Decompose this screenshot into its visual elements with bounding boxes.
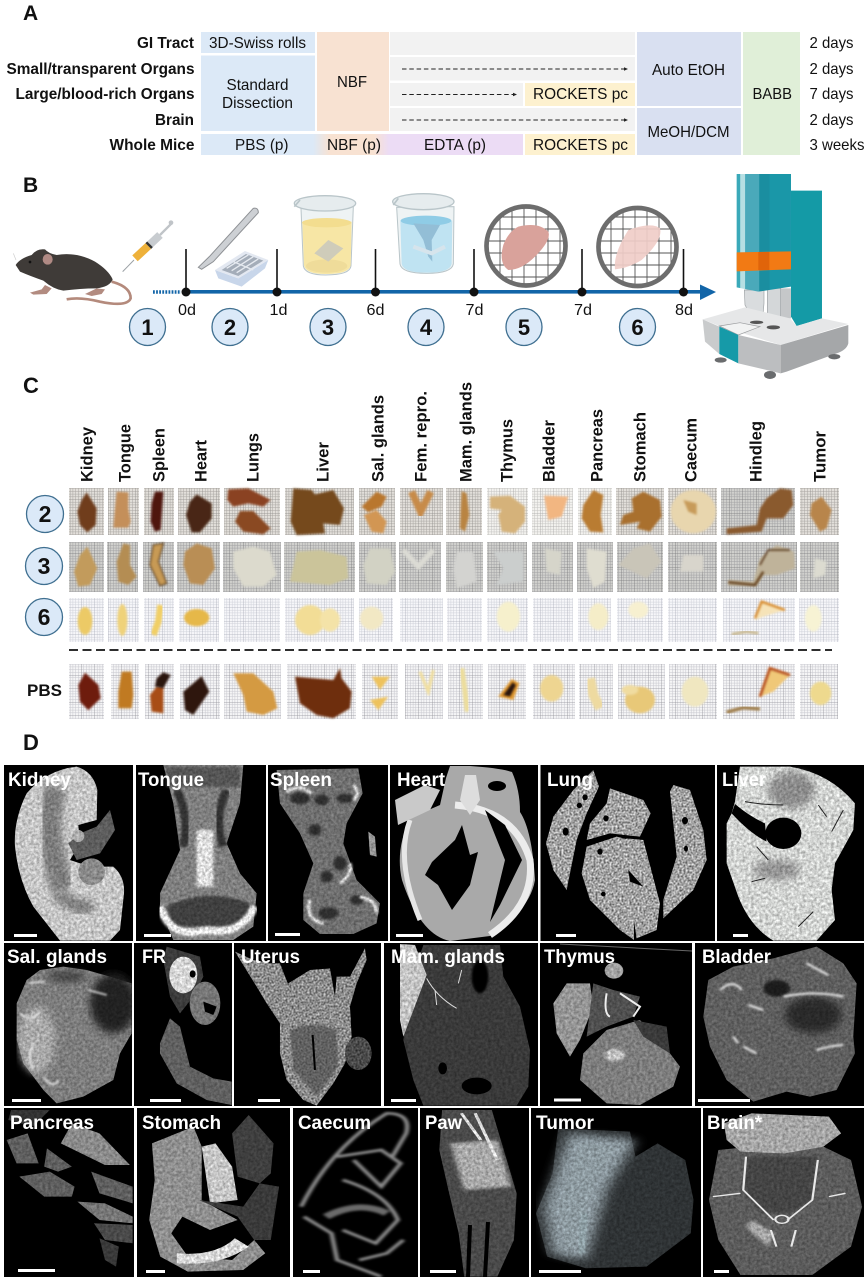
tile: Caecum [668, 542, 717, 592]
tile: Spleen [145, 664, 174, 719]
tile: Spleen [143, 542, 174, 592]
label: Uterus [241, 947, 300, 968]
scale bar [146, 1270, 165, 1273]
step markers and PBS row label: 3 [38, 553, 50, 579]
scale bar [303, 1270, 320, 1273]
label: Liver [722, 770, 767, 791]
tile: Tumor [800, 488, 839, 535]
icon: cleared organ on mesh, step 6 [598, 206, 679, 287]
tile: Spleen [144, 598, 174, 642]
tile: Tongue [108, 488, 139, 535]
row labels: Large/blood-rich Organs [16, 86, 195, 103]
label: Thymus [544, 947, 615, 968]
icon: syringe [123, 220, 173, 272]
tile: Tongue [107, 542, 138, 592]
organ column labels: Lungs [244, 433, 262, 482]
organ column labels: Tumor [812, 430, 830, 482]
image: Pancreas [4, 1108, 134, 1277]
tile: Thymus [487, 598, 528, 642]
scale bar [275, 933, 300, 936]
organ column labels: Bladder [540, 419, 558, 482]
step markers and PBS row label: 6 [38, 604, 50, 630]
tile: Female reproductive [400, 598, 443, 642]
icon: tissue cassette [215, 251, 268, 287]
block: Auto EtOH: Auto EtOH [652, 62, 725, 79]
tile: Stomach [617, 542, 663, 592]
block: MeOH/DCM [637, 108, 741, 155]
icon: mouse [13, 249, 131, 304]
tile: Tumor [800, 542, 839, 592]
tile: Thymus [488, 664, 526, 719]
tile: Salivary glands [359, 488, 395, 535]
image: FR [134, 943, 232, 1106]
tile: Spleen [144, 488, 174, 535]
step markers and PBS row label: PBS [27, 681, 62, 700]
tile: Salivary glands [359, 542, 396, 592]
tile: Heart [180, 664, 220, 719]
step markers and PBS row label [26, 496, 64, 700]
tile: Mammary glands [448, 664, 483, 719]
timeline day labels: 7d [574, 302, 592, 319]
tile: Mammary glands [446, 488, 482, 535]
row: step 6 tissue photos [69, 598, 839, 642]
tile: Heart [177, 542, 220, 592]
image: Thymus [540, 943, 692, 1106]
block: BABB: BABB [752, 86, 792, 103]
step circles 1 to 6: 1 [141, 315, 154, 340]
tile: Liver [285, 598, 354, 642]
durations [810, 35, 864, 154]
tile: Lungs [224, 488, 280, 535]
panel C: organ photographs [23, 373, 839, 719]
tile: Heart [178, 488, 220, 535]
heading: D: D [23, 730, 39, 755]
block: Standard Dissection: Dissection [222, 95, 293, 112]
icon: organ on mesh, step 5 [486, 206, 568, 287]
scale bar [556, 934, 576, 937]
tile: Hindleg [721, 542, 797, 592]
tile: Bladder [533, 664, 575, 719]
block: NBF [317, 32, 389, 131]
tile: Mammary glands [446, 542, 483, 592]
block: MeOH/DCM: MeOH/DCM [648, 124, 730, 141]
scale bar [430, 1270, 456, 1273]
image: Brain [703, 1108, 864, 1277]
block: NBF (p): NBF (p) [327, 137, 381, 154]
image: Lung [540, 765, 715, 941]
tile: Tongue [111, 664, 139, 719]
label: Mam. glands [391, 947, 505, 968]
tile: Liver [287, 664, 356, 719]
tile: Female reproductive [399, 542, 441, 592]
tile: Hindleg [723, 664, 795, 719]
label: Sal. glands [7, 947, 107, 968]
tile: Lungs [223, 542, 281, 592]
timeline arrow [153, 284, 716, 300]
timeline ticks [182, 249, 688, 296]
block: ROCKETS pc large organs: ROCKETS pc [533, 86, 628, 103]
step circles 1 to 6: 4 [420, 315, 433, 340]
organ column labels: Thymus [498, 419, 516, 482]
block: Standard Dissection [201, 56, 315, 131]
tile: Kidney [69, 664, 104, 719]
label: Tumor [536, 1113, 595, 1134]
image: Caecum [293, 1108, 418, 1277]
row: step 2 tissue photos [69, 488, 839, 535]
step circles 1 to 6: 6 [631, 315, 644, 340]
tile: Pancreas [578, 488, 612, 535]
tile: Lungs [224, 664, 281, 719]
block: 3D-Swiss rolls: 3D-Swiss rolls [209, 35, 306, 52]
tile: Kidney [69, 488, 104, 535]
tile: Thymus [487, 488, 528, 535]
scale bar [714, 1270, 729, 1273]
label: Tongue [138, 770, 204, 791]
tile: Kidney [69, 598, 104, 642]
organ column labels [78, 382, 830, 482]
panel D: light-sheet microscopy images [4, 730, 864, 1277]
organ column labels: Kidney [78, 426, 96, 482]
row: step 3 tissue photos [69, 542, 839, 592]
timeline day labels: 6d [366, 302, 384, 319]
row labels: Brain [155, 112, 194, 129]
organ column labels: Caecum [682, 418, 700, 482]
image: Bladder [695, 943, 864, 1106]
timeline day labels [178, 302, 693, 319]
icon: beaker with yellow solution [294, 196, 356, 275]
tile: Lungs [224, 598, 280, 642]
icon: forceps [198, 208, 258, 269]
scale bar [144, 934, 171, 937]
image: Uterus [234, 943, 381, 1106]
scale bar [12, 1099, 41, 1102]
organ column labels: Mam. glands [458, 382, 476, 482]
scale bar [14, 934, 37, 937]
icon: beaker with blue solution [393, 194, 454, 273]
label: FR [142, 947, 166, 968]
durations: 2 days [810, 112, 854, 129]
scale bar [391, 1099, 416, 1102]
step circles 1 to 6: 2 [224, 315, 236, 340]
tile: Thymus [487, 542, 527, 592]
block: ROCKETS pc large organs [525, 83, 635, 106]
dashed separator [69, 649, 832, 651]
tile: Stomach [616, 488, 664, 535]
tile: Liver [285, 488, 354, 535]
tile: Tumor [800, 664, 838, 719]
row labels [6, 35, 195, 154]
tile: Pancreas [579, 664, 613, 719]
organ column labels: Fem. repro. [412, 391, 430, 482]
image: Mammary glands [384, 943, 538, 1106]
tile: Tongue [108, 598, 139, 642]
tile: Bladder [533, 598, 573, 642]
organ column labels: Hindleg [748, 421, 766, 482]
tile: Tumor [799, 598, 839, 642]
tile: Salivary glands [359, 598, 393, 642]
heading: C: C [23, 373, 39, 398]
tile: Pancreas [577, 542, 613, 592]
tile: Stomach [617, 598, 663, 642]
image: Tongue [136, 765, 266, 941]
tile: Caecum [668, 488, 717, 535]
block: grey spacer GI tract [390, 32, 635, 55]
scale bar [554, 1098, 581, 1102]
label: Kidney [8, 770, 71, 791]
image: Liver [717, 765, 864, 941]
row labels: Small/transparent Organs [6, 61, 195, 78]
heading: A: A [23, 2, 38, 25]
icon: light-sheet microscope [703, 174, 848, 379]
block: NBF: NBF [337, 74, 367, 91]
organ column labels: Sal. glands [370, 395, 388, 482]
durations: 2 days [810, 61, 854, 78]
tile: Hindleg [721, 488, 795, 535]
tile: Hindleg [723, 598, 795, 642]
panel A: protocol table [6, 2, 864, 155]
step circles 1 to 6: 5 [518, 315, 530, 340]
tile: Female reproductive [400, 488, 443, 535]
image: Tumor [531, 1108, 701, 1277]
label: Bladder [702, 947, 772, 968]
scale bar [733, 934, 748, 937]
image: Stomach [137, 1108, 290, 1277]
panel B: timeline workflow [13, 174, 848, 379]
label: Brain* [707, 1113, 763, 1134]
block: brain dashed arrow [390, 108, 635, 131]
step markers and PBS row label: 2 [39, 501, 51, 527]
block: PBS (p) [201, 134, 313, 155]
block: Auto EtOH [637, 32, 741, 106]
block: small organs dashed arrow [390, 57, 635, 80]
durations: 2 days [810, 35, 854, 52]
tile: Bladder [532, 488, 573, 535]
block: Standard Dissection: Standard [226, 77, 288, 94]
label: Spleen [270, 770, 332, 791]
step circles 1 to 6: 3 [322, 315, 334, 340]
tile: Salivary glands [362, 664, 398, 719]
tile: Mammary glands [447, 598, 482, 642]
row labels: GI Tract [137, 35, 195, 52]
organ column labels: Liver [314, 441, 332, 482]
label: Stomach [142, 1113, 221, 1134]
image: Kidney [4, 765, 133, 941]
scale bar [150, 1099, 181, 1102]
timeline day labels: 8d [675, 302, 693, 319]
image: Salivary glands [4, 943, 132, 1106]
image: Heart [390, 765, 538, 941]
label: Pancreas [10, 1113, 94, 1134]
timeline day labels: 1d [270, 302, 288, 319]
label: Caecum [298, 1113, 371, 1134]
tile: Kidney [69, 542, 104, 592]
block: PBS (p): PBS (p) [235, 137, 288, 154]
tile: Heart [179, 598, 219, 642]
tile: Stomach [618, 664, 665, 719]
scale bar [698, 1099, 750, 1102]
organ column labels: Tongue [116, 424, 134, 482]
heading: B: B [23, 174, 38, 197]
tile: Female reproductive [405, 664, 443, 719]
organ column labels: Pancreas [588, 409, 606, 482]
tile: Bladder [532, 542, 573, 592]
tile: Liver [284, 542, 355, 592]
block: ROCKETS pc whole mice: ROCKETS pc [533, 137, 628, 154]
label: Lung [547, 770, 593, 791]
label: Paw [425, 1113, 462, 1134]
block: large organs dashed arrow [390, 83, 523, 106]
row labels: Whole Mice [110, 137, 195, 154]
row: PBS tissue photos [69, 664, 838, 719]
block: EDTA (p): EDTA (p) [424, 137, 486, 154]
step circles 1 to 6 [130, 308, 656, 346]
scale bar [18, 1269, 55, 1272]
block: EDTA (p) [389, 134, 523, 155]
organ column labels: Stomach [632, 412, 650, 482]
block: BABB [743, 32, 800, 155]
image: Paw [420, 1108, 529, 1277]
organ column labels: Spleen [150, 428, 168, 482]
label: Heart [397, 770, 446, 791]
scale bar [396, 934, 423, 937]
scale bar [539, 1270, 581, 1273]
durations: 7 days [810, 86, 854, 103]
tile: Caecum [668, 598, 717, 642]
image: Spleen [268, 765, 388, 941]
timeline day labels: 7d [466, 302, 484, 319]
timeline day labels: 0d [178, 302, 196, 319]
tile: Caecum [669, 664, 717, 719]
block: NBF (p) [313, 134, 389, 155]
tile: Pancreas [578, 598, 611, 642]
organ column labels: Heart [192, 439, 210, 482]
scale bar [258, 1099, 280, 1102]
